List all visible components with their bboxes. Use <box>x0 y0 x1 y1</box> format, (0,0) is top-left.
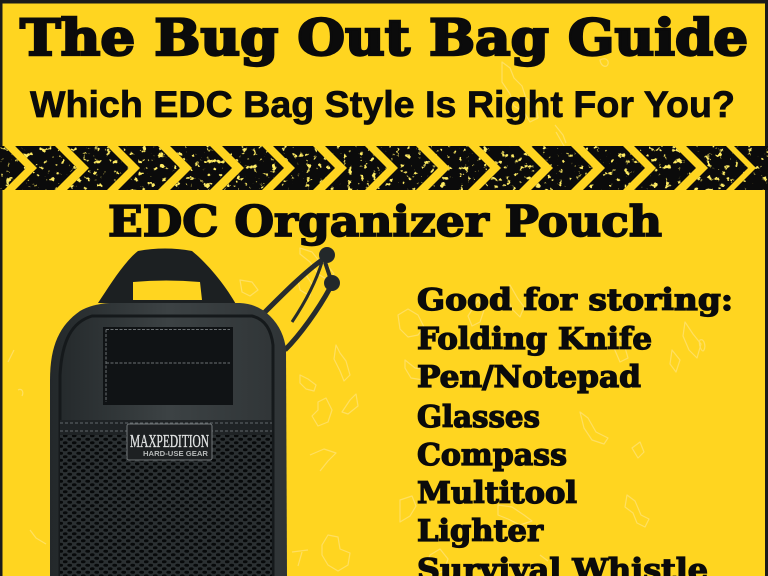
section heading: EDC Organizer Pouch <box>108 197 662 246</box>
velcro patch <box>103 327 233 405</box>
title: The Bug Out Bag Guide <box>20 8 748 67</box>
cord loop and knots <box>264 248 340 350</box>
zipper edge <box>60 316 273 576</box>
item: Multitool <box>417 476 577 511</box>
item: Pen/Notepad <box>417 360 641 395</box>
brand label <box>127 424 212 460</box>
item: Folding Knife <box>417 322 652 357</box>
item: Compass <box>417 438 567 473</box>
brand label: HARD-USE GEAR <box>143 451 208 458</box>
brand label: MAXPEDITION <box>130 431 209 451</box>
list heading: Good for storing: <box>417 283 733 318</box>
pouch handle <box>98 248 237 306</box>
pouch body <box>50 303 287 576</box>
photo: organizer pouch <box>50 248 340 576</box>
pocket stitched band <box>60 420 272 435</box>
subtitle: Which EDC Bag Style Is Right For You? <box>30 84 735 125</box>
distressed chevron band <box>0 146 768 190</box>
list: good for storing <box>417 283 733 576</box>
item: Glasses <box>417 400 540 435</box>
mesh pocket <box>60 435 272 576</box>
item: Lighter <box>417 514 544 549</box>
